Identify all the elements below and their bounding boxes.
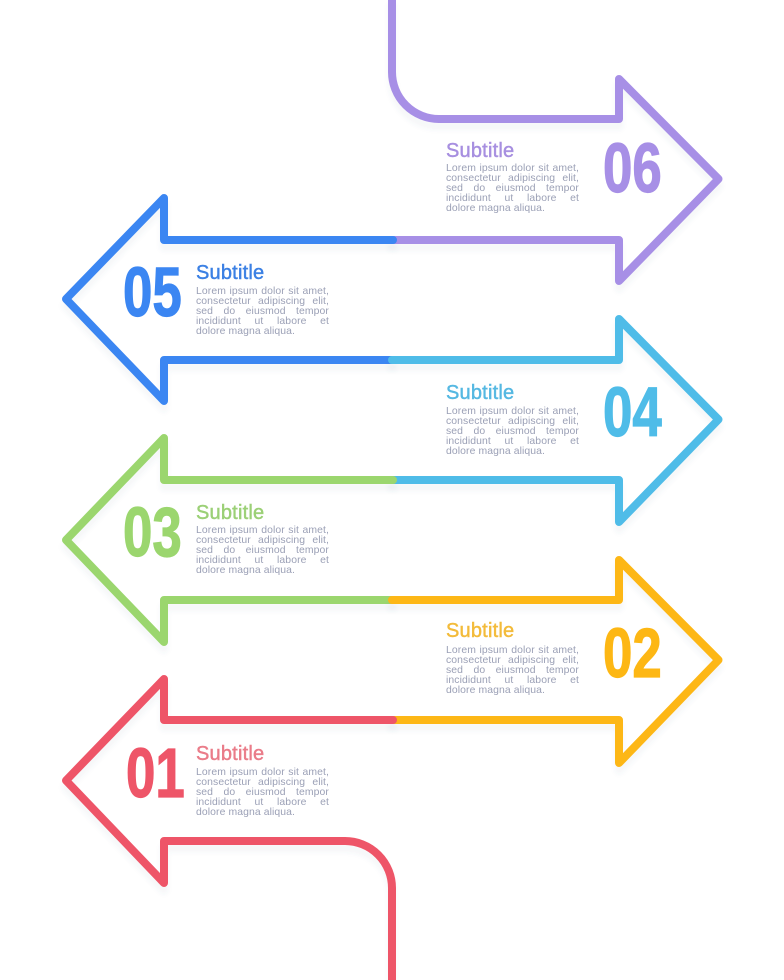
text block 05: incididunt ut labore et	[196, 316, 329, 327]
text block 04: Lorem ipsum dolor sit amet,	[446, 406, 579, 417]
text block 05: Lorem ipsum dolor sit amet,	[196, 286, 329, 297]
text block 03	[196, 525, 329, 576]
text block 04	[446, 406, 579, 457]
text block 01: sed do eiusmod tempor	[196, 787, 329, 798]
subtitle 02: Subtitle	[446, 620, 514, 642]
text block 01: Lorem ipsum dolor sit amet,	[196, 767, 329, 778]
text block 04: sed do eiusmod tempor	[446, 426, 579, 437]
text block 04: incididunt ut labore et	[446, 436, 579, 447]
text block 05: consectetur adipiscing elit,	[196, 296, 329, 307]
number 02: 02	[603, 614, 662, 692]
arrow 05 outline	[66, 198, 393, 401]
text block 01: incididunt ut labore et	[196, 797, 329, 808]
panel: step 01	[126, 734, 329, 818]
text block 06: sed do eiusmod tempor	[446, 183, 579, 194]
number 04: 04	[603, 373, 662, 451]
panel: step 03	[123, 493, 329, 576]
subtitle 03: Subtitle	[196, 502, 264, 524]
text block 02: consectetur adipiscing elit,	[446, 655, 579, 666]
panel: step 05	[123, 253, 329, 337]
number 05: 05	[123, 253, 182, 331]
text block 02	[446, 645, 579, 696]
subtitle 04: Subtitle	[446, 382, 514, 404]
text block 03: dolore magna aliqua.	[196, 565, 295, 576]
number 03: 03	[123, 493, 182, 571]
text block 05: sed do eiusmod tempor	[196, 306, 329, 317]
text block 03: incididunt ut labore et	[196, 555, 329, 566]
number 06: 06	[603, 129, 662, 207]
subtitle 06: Subtitle	[446, 140, 514, 162]
text block 01: consectetur adipiscing elit,	[196, 777, 329, 788]
panel: step 06	[446, 129, 662, 214]
panel: step 02	[446, 614, 662, 696]
text block 02: incididunt ut labore et	[446, 675, 579, 686]
text block 03: consectetur adipiscing elit,	[196, 535, 329, 546]
text block 06	[446, 163, 579, 214]
text block 01	[196, 767, 329, 818]
arrow 06 outline	[392, 0, 718, 281]
text block 06: consectetur adipiscing elit,	[446, 173, 579, 184]
text block 06: Lorem ipsum dolor sit amet,	[446, 163, 579, 174]
arrow 03 outline	[66, 438, 393, 642]
arrow 04 outline	[392, 319, 718, 522]
text block 01: dolore magna aliqua.	[196, 807, 295, 818]
text block 03: sed do eiusmod tempor	[196, 545, 329, 556]
subtitle 05: Subtitle	[196, 262, 264, 284]
text block 06: incididunt ut labore et	[446, 193, 579, 204]
panel: step 04	[446, 373, 662, 457]
text block 04: dolore magna aliqua.	[446, 446, 545, 457]
text block 04: consectetur adipiscing elit,	[446, 416, 579, 427]
text block 06: dolore magna aliqua.	[446, 203, 545, 214]
arrow 01 outline	[66, 679, 393, 980]
text block 05	[196, 286, 329, 337]
text block 02: dolore magna aliqua.	[446, 685, 545, 696]
subtitle 01: Subtitle	[196, 743, 264, 765]
text block 03: Lorem ipsum dolor sit amet,	[196, 525, 329, 536]
arrow 02 outline	[392, 560, 718, 763]
number 01: 01	[126, 734, 185, 812]
text block 02: sed do eiusmod tempor	[446, 665, 579, 676]
text block 02: Lorem ipsum dolor sit amet,	[446, 645, 579, 656]
text block 05: dolore magna aliqua.	[196, 326, 295, 337]
